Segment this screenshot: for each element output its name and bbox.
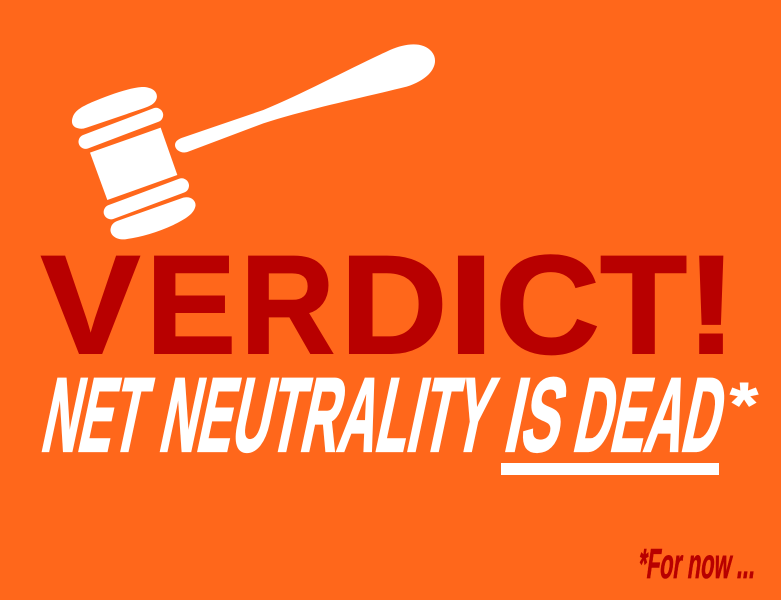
subtitle word: IS: IS: [497, 357, 577, 474]
subtitle: NET NEUTRALITY IS DEAD: [34, 357, 759, 474]
title: VERDICT!: C: [495, 226, 600, 383]
icon: gavel: [72, 44, 435, 239]
title: VERDICT!: !: [686, 226, 737, 383]
title: VERDICT!: R: [240, 226, 335, 383]
gavel upper band: [86, 115, 156, 142]
title: VERDICT!: T: [600, 226, 687, 383]
underline: [501, 463, 719, 475]
title: VERDICT!: E: [146, 226, 236, 383]
title: VERDICT!: V: [41, 226, 140, 383]
gavel handle: [175, 44, 435, 152]
gavel body: [90, 128, 177, 200]
subtitle asterisk: *: [730, 371, 759, 440]
title: VERDICT!: I: [448, 226, 494, 383]
gavel bottom cap: [110, 197, 196, 239]
subtitle word: NET: NET: [34, 357, 160, 474]
gavel top cap: [72, 87, 157, 129]
title: VERDICT!: D: [340, 226, 448, 383]
gavel lower band: [111, 186, 182, 212]
